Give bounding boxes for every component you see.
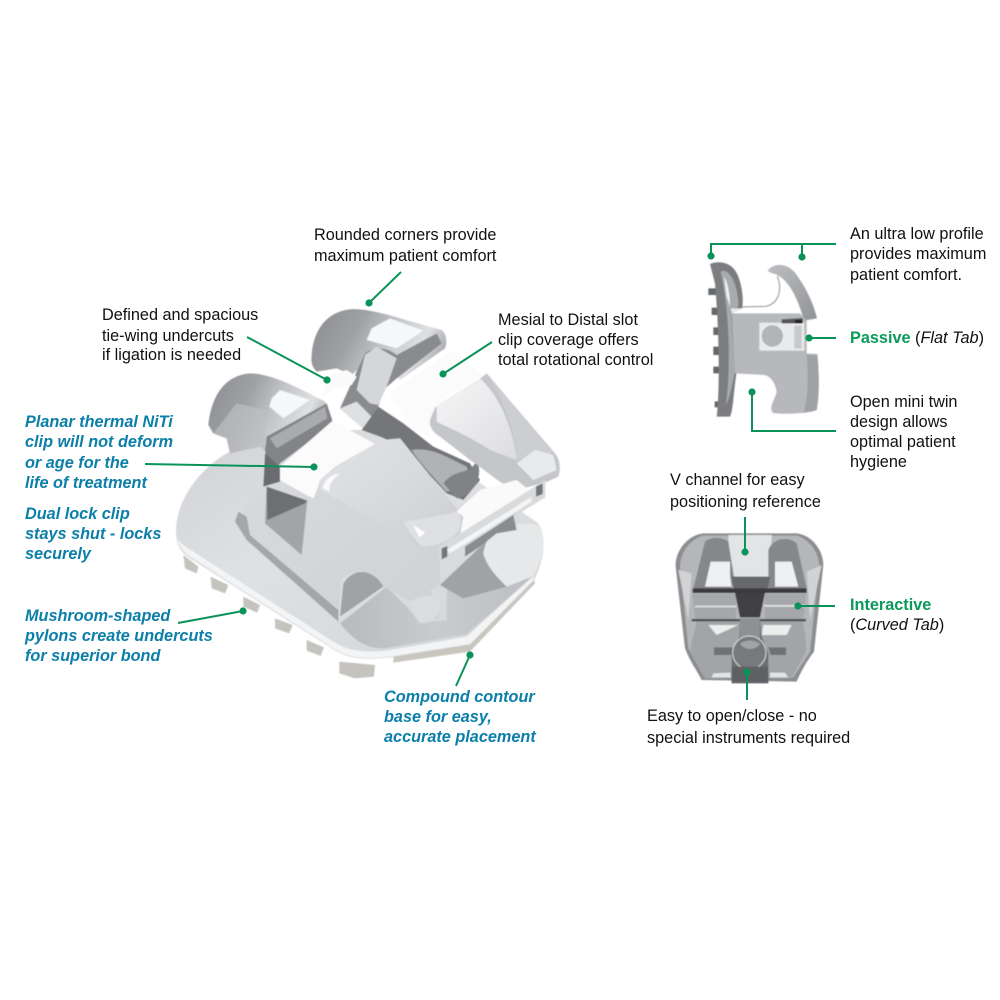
label: open mini twin: design allows <box>850 413 948 431</box>
leader: compound base <box>456 651 474 686</box>
slot window <box>263 453 307 555</box>
pylons <box>183 555 535 678</box>
label: open mini twin: Open mini twin <box>850 393 957 411</box>
label: rounded corners: maximum patient comfort <box>314 247 497 265</box>
label: mushroom pylons: Mushroom-shaped <box>25 607 170 625</box>
leader: easy to open <box>743 668 751 700</box>
clip side slot <box>439 480 545 563</box>
label: dual lock clip: securely <box>25 545 92 563</box>
label: planar NiTi clip: or age for the <box>25 454 129 472</box>
front clip top <box>280 421 375 499</box>
label: mushroom pylons: for superior bond <box>25 647 161 665</box>
central dark channel <box>362 407 480 500</box>
center bar and tabs <box>692 588 807 621</box>
label: planar NiTi clip: Planar thermal NiTi <box>25 413 173 431</box>
leader: passive <box>805 334 836 342</box>
label: open mini twin: hygiene <box>850 453 907 471</box>
front block face <box>235 438 463 622</box>
label: ultra low profile: provides maximum <box>850 245 986 263</box>
soft shaded front view <box>676 533 823 683</box>
label: interactive curved tab: Curved Tab) <box>855 616 944 634</box>
label: ultra low profile: patient comfort. <box>850 266 962 284</box>
label: slot clip coverage: Mesial to Distal slot <box>498 311 638 329</box>
label: planar NiTi clip: clip will not deform <box>25 433 173 451</box>
label: compound contour base: Compound contour <box>384 688 535 706</box>
label: planar NiTi clip: life of treatment <box>25 474 147 492</box>
lower tie wings <box>690 622 807 678</box>
label: passive flat tab: Passive (Flat Tab) <box>850 329 984 347</box>
outer body <box>676 533 823 682</box>
side view bracket <box>708 262 819 417</box>
body with slot <box>731 308 819 414</box>
label: V channel: positioning reference <box>670 493 821 511</box>
leader: NiTi clip <box>145 463 318 471</box>
leader: rounded corners <box>365 272 401 307</box>
lower channel <box>732 618 768 683</box>
label: interactive curved tab: ( <box>850 616 856 634</box>
label: dual lock clip: Dual lock clip <box>25 505 130 523</box>
label: interactive curved tab: Interactive <box>850 596 931 614</box>
label: ultra low profile: An ultra low profile <box>850 225 984 243</box>
soft shaded bracket <box>176 309 560 678</box>
main bracket illustration <box>176 309 560 678</box>
leader: tie-wing undercuts <box>247 337 331 384</box>
label: V channel: V channel for easy <box>670 471 805 489</box>
leader: slot clip coverage <box>439 342 492 378</box>
label: tie-wing undercuts: tie-wing undercuts <box>102 327 234 345</box>
upper hook wing <box>742 265 817 321</box>
label: slot clip coverage: clip coverage offers <box>498 331 639 349</box>
right clip top <box>390 350 482 437</box>
leader: pylons <box>178 607 247 623</box>
rear left wing <box>208 373 333 477</box>
base crescent <box>708 262 743 417</box>
label: compound contour base: accurate placement <box>384 728 536 746</box>
label: tie-wing undercuts: Defined and spacious <box>102 306 258 324</box>
soft shaded side view <box>708 262 819 417</box>
label: mushroom pylons: pylons create undercuts <box>24 627 213 645</box>
base plate <box>176 430 544 659</box>
right block <box>429 373 560 490</box>
upper tie wings and channel <box>693 535 807 592</box>
front view bracket <box>676 533 823 683</box>
label: slot clip coverage: total rotational control <box>498 351 653 369</box>
label: tie-wing undercuts: if ligation is needed <box>102 346 241 364</box>
label: easy to open: special instruments required <box>647 729 850 747</box>
leader: V channel <box>741 517 749 556</box>
label: compound contour base: base for easy, <box>384 708 492 726</box>
label: easy to open: Easy to open/close - no <box>647 707 817 725</box>
leader: open mini twin <box>748 388 836 431</box>
label: open mini twin: optimal patient <box>850 433 956 451</box>
label: rounded corners: Rounded corners provide <box>314 226 496 244</box>
leader: interactive <box>794 602 835 610</box>
label: dual lock clip: stays shut - locks <box>25 525 161 543</box>
rear right wing <box>311 309 446 428</box>
leader: ultra low profile <box>707 244 836 261</box>
